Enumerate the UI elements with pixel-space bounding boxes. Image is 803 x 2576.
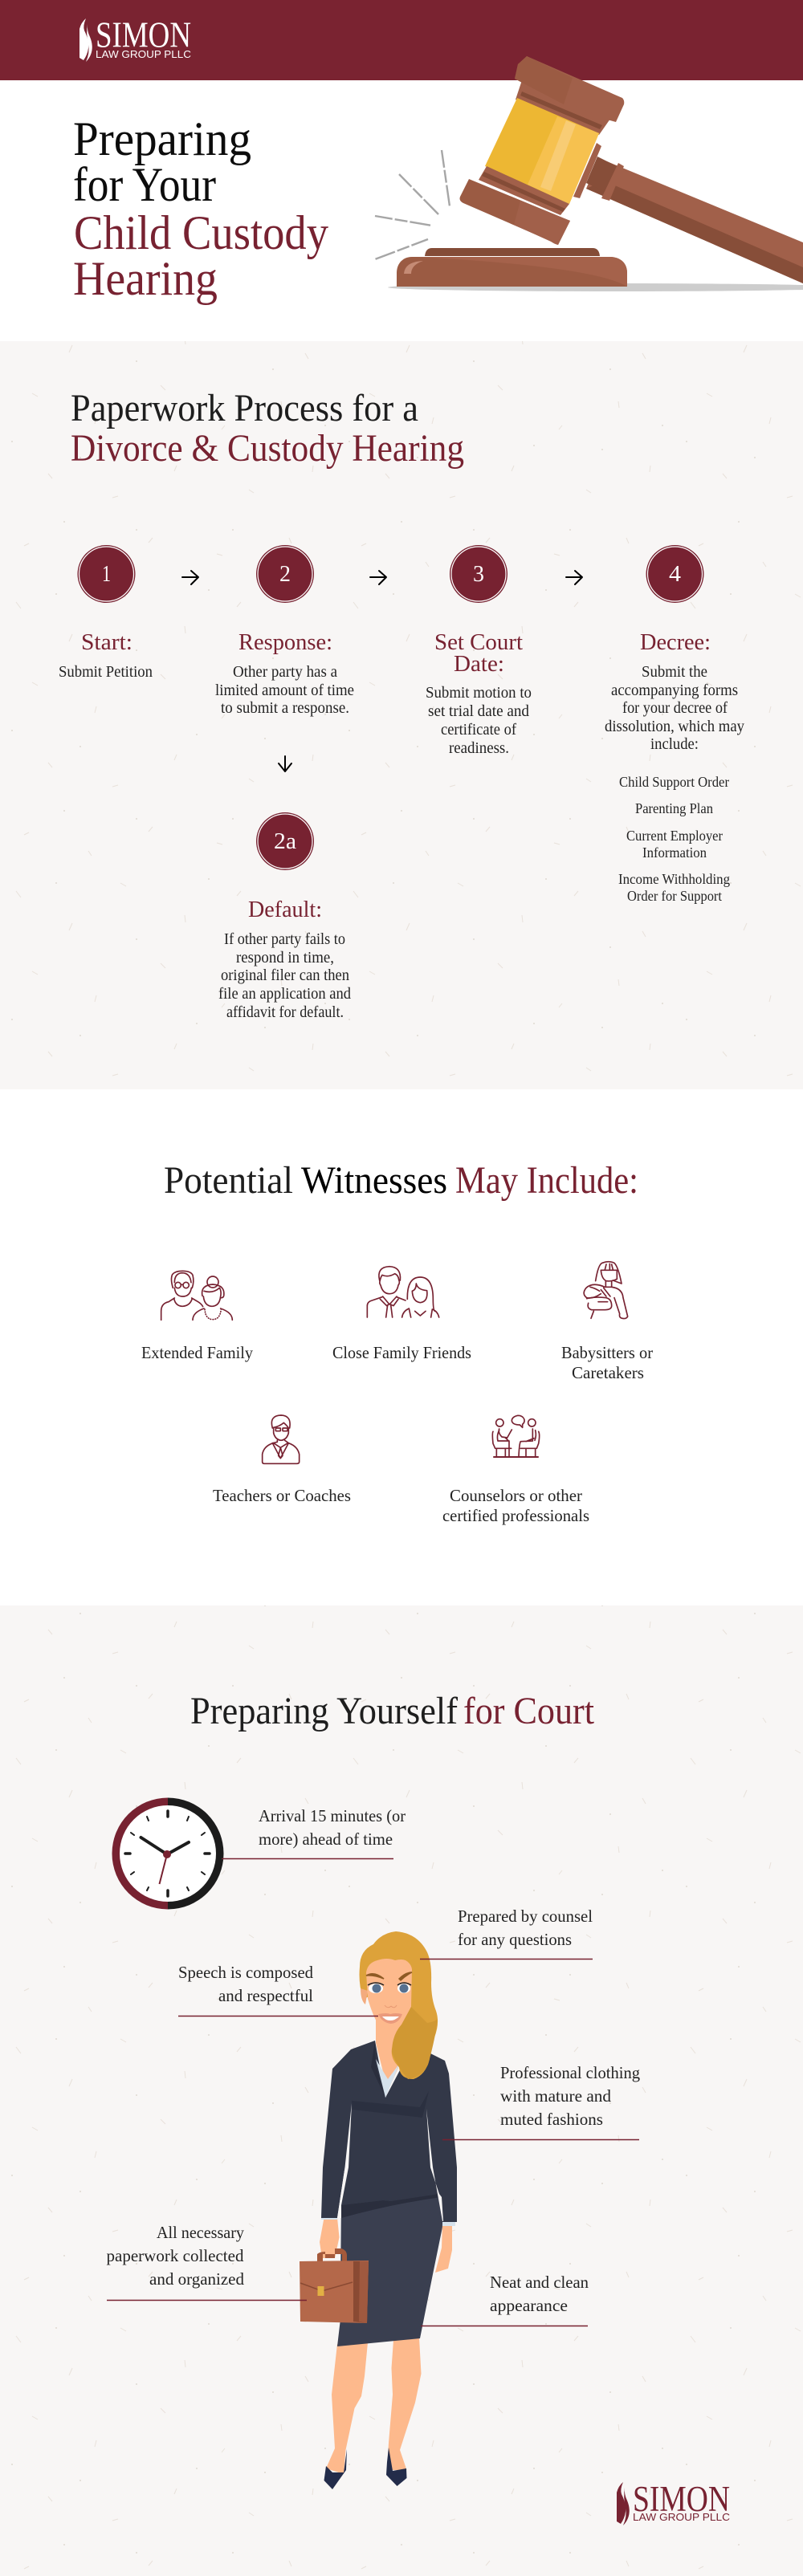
mouth bbox=[378, 2013, 402, 2024]
icon: teachers or coaches bbox=[263, 1415, 300, 1463]
heading: paperwork process: Paperwork Process for a bbox=[71, 387, 418, 429]
callout: paperwork: All necessary bbox=[157, 2223, 244, 2242]
step 1: 1 bbox=[102, 561, 111, 587]
step 4 bbox=[605, 545, 744, 904]
step 4: Child Support Order bbox=[619, 774, 729, 790]
labels: witnesses bbox=[141, 1343, 653, 1525]
step 4: dissolution, which may bbox=[605, 718, 744, 735]
sleeve cuffs bbox=[321, 2217, 455, 2226]
logo: Simon Law Group bottom: LAW GROUP PLLC bbox=[633, 2512, 730, 2523]
sleeve gaps bbox=[337, 2103, 443, 2221]
title: Preparing bbox=[73, 112, 251, 165]
arrow: step 3 to 4 bbox=[566, 571, 582, 584]
callout: prepared by counsel: Prepared by counsel bbox=[458, 1907, 593, 1926]
neck bbox=[376, 2019, 402, 2091]
heading: preparing yourself: for Court bbox=[463, 1690, 595, 1732]
briefcase bbox=[300, 2248, 369, 2323]
step 2: limited amount of time bbox=[215, 682, 354, 699]
callout: prepared by counsel bbox=[420, 1907, 593, 1959]
step 3 bbox=[426, 545, 532, 757]
step 4: Current Employer bbox=[626, 828, 723, 844]
callout: arrival: more) ahead of time bbox=[259, 1829, 393, 1849]
callout: professional clothing: muted fashions bbox=[500, 2110, 603, 2129]
callout: professional clothing: Professional clothing bbox=[500, 2063, 640, 2082]
step 4: Submit the bbox=[642, 664, 707, 681]
title: for Your bbox=[73, 158, 216, 211]
heading: witnesses: Potential bbox=[164, 1159, 293, 1202]
step 4: for your decree of bbox=[622, 700, 728, 717]
icon: gavel bbox=[375, 56, 803, 291]
arrow: step 2 to 3 bbox=[370, 571, 386, 584]
panel: paperwork process bbox=[0, 341, 803, 1089]
step 4: include: bbox=[650, 736, 699, 753]
step 3: Submit motion to bbox=[426, 685, 532, 702]
hands bbox=[320, 2218, 339, 2258]
step 3: Set Court bbox=[434, 629, 523, 655]
callout: paperwork: paperwork collected bbox=[106, 2246, 244, 2265]
skirt bbox=[337, 2191, 443, 2346]
heading: paperwork process bbox=[71, 387, 464, 470]
header band bbox=[0, 0, 803, 80]
hair front lock bbox=[392, 2007, 438, 2079]
step 1: Start: bbox=[81, 629, 132, 655]
step 1: Submit Petition bbox=[59, 664, 153, 681]
step 4: 4 bbox=[669, 561, 682, 587]
step 4: accompanying forms bbox=[611, 682, 738, 699]
title bbox=[73, 112, 328, 305]
eyebrows bbox=[366, 1972, 412, 1980]
step 2a: Default: bbox=[248, 897, 322, 922]
labels: witnesses: certified professionals bbox=[442, 1506, 589, 1525]
step 2a bbox=[218, 812, 351, 1021]
labels: witnesses: Close Family Friends bbox=[332, 1343, 471, 1362]
callout: neat appearance: Neat and clean bbox=[490, 2273, 589, 2292]
jacket bbox=[321, 2041, 457, 2222]
step 4: Information bbox=[642, 844, 707, 861]
icon: counselors bbox=[492, 1415, 540, 1457]
step 2: Response: bbox=[238, 629, 332, 655]
callout: arrival: Arrival 15 minutes (or bbox=[259, 1806, 406, 1825]
heading: paperwork process: Divorce & Custody Hearing bbox=[71, 427, 464, 470]
callout: speech: and respectful bbox=[218, 1986, 313, 2005]
icon: clock bbox=[112, 1798, 224, 1909]
face bbox=[366, 1959, 412, 2029]
callout: neat appearance: appearance bbox=[490, 2296, 568, 2315]
icon: extended family bbox=[161, 1271, 232, 1320]
nose bbox=[385, 2005, 397, 2008]
hair back bbox=[360, 1931, 438, 2079]
step 2: 2 bbox=[279, 561, 291, 587]
shoes bbox=[324, 2449, 347, 2489]
title: Child Custody bbox=[74, 206, 328, 259]
labels: witnesses: Caretakers bbox=[572, 1363, 644, 1382]
step 2a: respond in time, bbox=[236, 950, 334, 967]
logo: Simon Law Group bottom bbox=[617, 2479, 730, 2525]
callout: speech: Speech is composed bbox=[178, 1963, 313, 1982]
step 3: set trial date and bbox=[428, 703, 529, 720]
callout: speech bbox=[178, 1963, 378, 2016]
step 3: certificate of bbox=[441, 722, 516, 739]
labels: witnesses: Teachers or Coaches bbox=[213, 1486, 351, 1505]
legs bbox=[326, 2342, 368, 2474]
step 2a: 2a bbox=[274, 828, 296, 854]
callout: paperwork bbox=[106, 2223, 307, 2301]
callout: arrival bbox=[222, 1806, 406, 1859]
step 2 bbox=[215, 545, 354, 717]
ear bbox=[361, 1988, 368, 2004]
arrow: step 1 to 2 bbox=[182, 571, 198, 584]
labels: witnesses: Counselors or other bbox=[450, 1486, 582, 1505]
step 4: Decree: bbox=[640, 629, 711, 655]
labels: witnesses: Extended Family bbox=[141, 1343, 253, 1362]
callout: professional clothing: with mature and bbox=[500, 2086, 611, 2106]
step 2: to submit a response. bbox=[221, 700, 349, 717]
eyes bbox=[368, 1983, 411, 1993]
title: Hearing bbox=[73, 252, 218, 305]
icon: babysitters bbox=[584, 1262, 628, 1319]
step 1 bbox=[59, 545, 153, 681]
step 2a: affidavit for default. bbox=[226, 1004, 344, 1021]
panel: potential witnesses bbox=[141, 1159, 653, 1525]
callout: professional clothing bbox=[442, 2063, 640, 2140]
step 4: Parenting Plan bbox=[635, 800, 713, 816]
illustration: woman with briefcase bbox=[300, 1931, 457, 2489]
step 4: Income Withholding bbox=[618, 871, 730, 887]
labels: witnesses: Babysitters or bbox=[561, 1343, 653, 1362]
arrow: step 2 to 2a bbox=[279, 756, 291, 771]
step 4: Order for Support bbox=[627, 888, 722, 904]
step 3: readiness. bbox=[449, 740, 509, 757]
shirt bbox=[376, 2059, 400, 2098]
step 2a: file an application and bbox=[218, 986, 351, 1003]
heading: preparing yourself: Preparing Yourself bbox=[190, 1690, 458, 1732]
step 3: Date: bbox=[454, 651, 504, 677]
callout: neat appearance bbox=[421, 2273, 589, 2326]
step 2a: original filer can then bbox=[221, 967, 349, 984]
step 2a: If other party fails to bbox=[224, 931, 345, 948]
heading: witnesses: Witnesses bbox=[301, 1159, 447, 1202]
heading: witnesses bbox=[164, 1159, 638, 1202]
step 3: 3 bbox=[473, 561, 484, 587]
callout: prepared by counsel: for any questions bbox=[458, 1930, 572, 1949]
logo: Simon Law Group bottom: SIMON bbox=[633, 2479, 730, 2519]
logo: Simon Law Group top: SIMON bbox=[96, 14, 191, 55]
heading: witnesses: May Include: bbox=[455, 1159, 638, 1202]
panel: preparing yourself bbox=[0, 1605, 803, 2576]
step 2: Other party has a bbox=[233, 664, 337, 681]
logo: Simon Law Group top bbox=[79, 14, 191, 62]
logo: Simon Law Group top: LAW GROUP PLLC bbox=[96, 49, 191, 60]
callout: paperwork: and organized bbox=[149, 2269, 244, 2289]
icon: close family friends bbox=[367, 1267, 439, 1317]
